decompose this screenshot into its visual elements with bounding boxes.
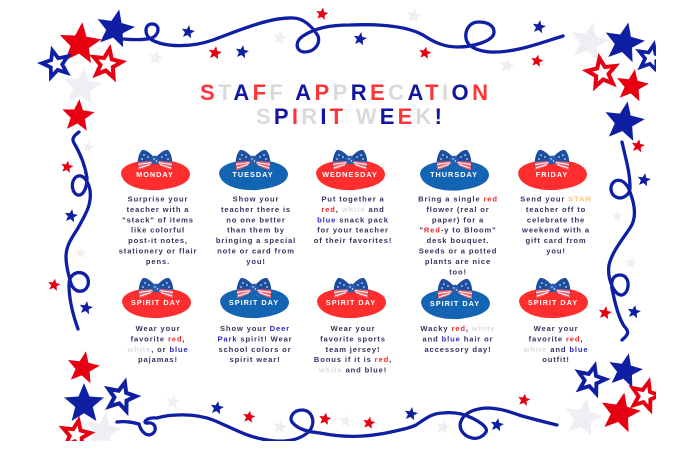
card: Spirit Day 1 <box>122 278 191 364</box>
card: Friday: FRIDAY <box>536 170 568 179</box>
ribbon: right <box>609 142 635 340</box>
card: Spirit Day 4: Wacky red, white <box>420 324 496 333</box>
card: Spirit Day 5: Wear your <box>534 324 578 333</box>
ribbon: bottom <box>117 408 557 441</box>
card: Wednesday: WEDNESDAY <box>322 170 378 179</box>
card: Wednesday: red, white and <box>321 205 385 214</box>
card: Thursday: Bring a single red <box>418 194 498 204</box>
card: Thursday: desk bouquet. <box>427 236 489 245</box>
card: Tuesday <box>216 150 296 266</box>
card: Spirit Day 5 <box>519 278 588 364</box>
title <box>200 80 488 129</box>
card: Spirit Day 5: favorite red, <box>529 334 583 343</box>
card: Friday: teacher off to <box>526 205 586 214</box>
card: Monday: post-it notes, <box>128 236 188 245</box>
card: Spirit Day 4: SPIRIT DAY <box>430 299 480 308</box>
card: Monday: "stack" of items <box>122 215 194 224</box>
small stars around the border <box>47 7 652 434</box>
card: Monday: MONDAY <box>136 170 174 179</box>
card: Thursday: flower (real or <box>426 205 490 214</box>
card: Spirit Day 5: outfit! <box>542 355 570 364</box>
card: Tuesday: TUESDAY <box>232 170 274 179</box>
card: Spirit Day 1: Wear your <box>136 324 180 333</box>
card: Monday: like colorful <box>131 226 185 235</box>
title: SPIRIT WEEK! <box>256 104 442 129</box>
card: Tuesday: no one better <box>226 215 286 224</box>
card: Spirit Day 1: favorite red, <box>131 334 185 343</box>
card: Friday: you! <box>546 246 566 256</box>
card: Thursday: plants are nice <box>425 257 491 266</box>
card: Spirit Day 2: school colors or <box>218 345 292 354</box>
card: Spirit Day 2 <box>217 278 293 364</box>
stars: top left cluster <box>40 5 138 131</box>
card: Spirit Day 3: team jersey! <box>326 345 380 354</box>
card: Wednesday: Put together a <box>321 194 385 204</box>
card: Tuesday: you! <box>246 257 266 266</box>
stars: bottom right cluster <box>566 354 656 436</box>
card: Spirit Day 5: white and blue <box>524 345 588 354</box>
card: Tuesday: teacher there is <box>221 205 291 214</box>
card: Monday <box>119 150 197 266</box>
card: Monday: Surprise your <box>128 194 188 204</box>
card: Friday: weekend with a <box>521 226 590 235</box>
card: Spirit Day 4: accessory day! <box>424 345 492 354</box>
card: Monday: teacher with a <box>127 205 189 214</box>
card: Thursday: Seeds or a potted <box>419 246 497 256</box>
card: Friday: gift card from <box>525 236 587 245</box>
card: Tuesday: than them by <box>227 226 285 235</box>
card: Spirit Day 3: Bonus if it is red, <box>314 355 392 364</box>
card: Wednesday: of their favorites! <box>314 236 392 245</box>
card: Monday: pens. <box>146 257 170 266</box>
card: Spirit Day 4: and blue hair or <box>423 334 493 343</box>
card: Spirit Day 4 <box>420 279 496 354</box>
card: Spirit Day 1: white, or blue <box>127 345 189 354</box>
card: Spirit Day 2: SPIRIT DAY <box>229 298 279 307</box>
card: Wednesday: for your teacher <box>317 226 389 235</box>
card: Spirit Day 1: pajamas! <box>138 355 178 364</box>
card: Wednesday: blue snack pack <box>317 215 389 224</box>
card: Spirit Day 1: SPIRIT DAY <box>131 298 181 307</box>
card: Spirit Day 3: favorite sports <box>320 334 386 343</box>
title: STAFF APPRECATION <box>200 80 488 105</box>
card: Monday: stationery or flair <box>119 246 197 256</box>
card: Spirit Day 3: Wear your <box>331 324 375 333</box>
card: Thursday: too! <box>449 267 467 276</box>
card: Thursday: THURSDAY <box>430 170 478 179</box>
card: Spirit Day 3: SPIRIT DAY <box>326 298 376 307</box>
card: Thursday <box>418 150 498 276</box>
card: Spirit Day 3: white and blue! <box>319 366 387 375</box>
card: Friday: celebrate the <box>527 215 585 224</box>
card: Wednesday <box>314 150 392 245</box>
card: Tuesday: bringing a special <box>216 236 296 245</box>
card: Thursday: paper) for a <box>432 215 484 224</box>
card: Friday <box>518 150 592 256</box>
card: Spirit Day 2: spirit wear! <box>230 355 280 364</box>
card: Spirit Day 3 <box>314 278 392 375</box>
card: Thursday: "Red-y to Bloom" <box>419 226 497 235</box>
card: Spirit Day 2: Park spirit! Wear <box>217 334 293 343</box>
card: Friday: Send your STAR <box>520 194 592 204</box>
card: Tuesday: Show your <box>233 194 279 204</box>
card: Spirit Day 5: SPIRIT DAY <box>528 298 578 307</box>
card: Spirit Day 2: Show your Deer <box>220 324 290 333</box>
stars: bottom left cluster <box>60 348 139 449</box>
ribbon: top <box>123 18 563 52</box>
stars: top right cluster <box>572 22 656 141</box>
ribbon: left <box>66 132 90 329</box>
card: Tuesday: note or card from <box>217 246 295 256</box>
